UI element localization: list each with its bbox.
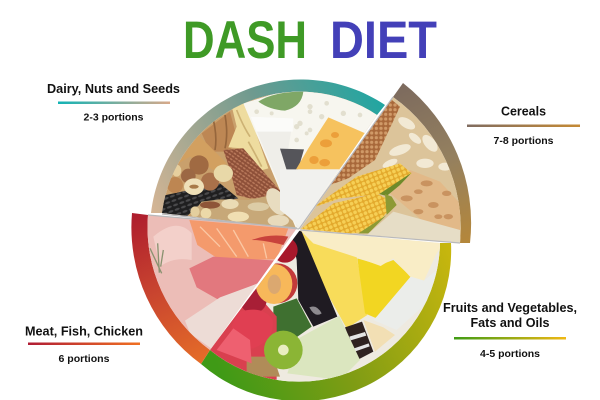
meat: red beef <box>189 257 277 301</box>
heading: Dairy, Nuts and Seeds <box>47 81 180 96</box>
oils: white jug <box>373 270 437 330</box>
wedge: fruits, vegetables and oils photo <box>210 230 440 382</box>
ring: cereals <box>393 83 471 243</box>
meat: pale pork <box>153 226 192 267</box>
nuts: black seeds <box>160 183 238 217</box>
wedge: cereals photo <box>300 97 461 242</box>
ring: dairy, nuts and seeds <box>151 79 385 213</box>
oils: butter <box>300 230 443 281</box>
pie chart: food groups <box>131 79 471 400</box>
ring: fruits, vegetables, fats and oils <box>201 243 451 400</box>
dairy: cheese <box>296 117 365 169</box>
vegetables: dark bottle <box>290 227 337 327</box>
label: dairy, nuts and seeds <box>47 81 180 124</box>
gradient rule <box>28 342 140 345</box>
divider lines between wedges <box>148 97 460 243</box>
dairy: milk jar <box>280 169 338 221</box>
label: meat, fish, chicken <box>25 324 143 365</box>
heading line one: Fruits and Vegetables, <box>443 300 577 315</box>
portions: 4-5 portions <box>480 348 540 360</box>
cereals: oat flakes <box>381 115 452 171</box>
oils: yellow glass <box>300 230 367 328</box>
nuts: cashews <box>228 102 268 172</box>
gradient rule <box>467 124 580 127</box>
oils: cream base <box>363 320 395 352</box>
oils: bottle cap <box>345 322 373 360</box>
title <box>183 11 437 70</box>
dairy: basil leaf <box>258 92 303 111</box>
wedge: nuts, seeds and dairy photo <box>162 92 377 228</box>
label: cereals <box>467 104 580 147</box>
dairy: curds right of the glass <box>294 101 362 132</box>
dairy: milk glass <box>251 117 312 229</box>
dairy: cottage cheese base <box>244 92 377 228</box>
fruit: strawberry backdrop <box>208 290 277 387</box>
heading: Cereals <box>501 104 546 118</box>
portions: 7-8 portions <box>494 135 554 147</box>
oils: olive oil <box>357 258 411 318</box>
title word: DIET: DIET <box>330 11 437 70</box>
nuts: light walnut <box>178 135 227 170</box>
cereals: bottom corn cob <box>301 194 386 234</box>
title word: DASH: DASH <box>183 11 307 70</box>
dairy: cottage curds <box>254 109 324 142</box>
gradient rule <box>454 337 566 340</box>
fruit: cut plum <box>256 263 297 304</box>
ring: meat, fish, chicken <box>131 213 210 364</box>
fruit: dark plum <box>277 240 298 263</box>
cereals: buckwheat <box>330 98 400 185</box>
nuts: walnut <box>202 112 238 152</box>
fruit: kiwi <box>247 331 303 377</box>
cereals: lentils <box>390 170 460 230</box>
label: fruits and vegetables, fats and oils <box>443 300 577 360</box>
meat: salmon <box>189 220 288 260</box>
cereals: rice <box>367 212 460 245</box>
wedge: meat, fish and chicken photo <box>140 210 305 360</box>
vegetables: cabbage <box>287 316 360 380</box>
portions: 6 portions <box>58 353 110 365</box>
fruit: strawberry <box>217 310 273 363</box>
nuts: flax seeds <box>223 148 287 198</box>
heading: Meat, Fish, Chicken <box>25 324 143 338</box>
gradient rule <box>58 102 170 104</box>
nuts: pistachios and almonds <box>190 188 295 227</box>
portions: 2-3 portions <box>84 112 144 124</box>
meat: chicken leg <box>185 283 258 350</box>
meat: rosemary sprig <box>150 243 163 273</box>
fruit: red plum behind <box>242 287 266 311</box>
cereals: top corn cob <box>313 163 412 207</box>
vegetables: avocado <box>273 298 312 337</box>
nuts: hazelnuts <box>167 155 233 195</box>
dairy: dark background behind cheese <box>280 149 304 170</box>
heading line two: Fats and Oils <box>470 315 550 330</box>
